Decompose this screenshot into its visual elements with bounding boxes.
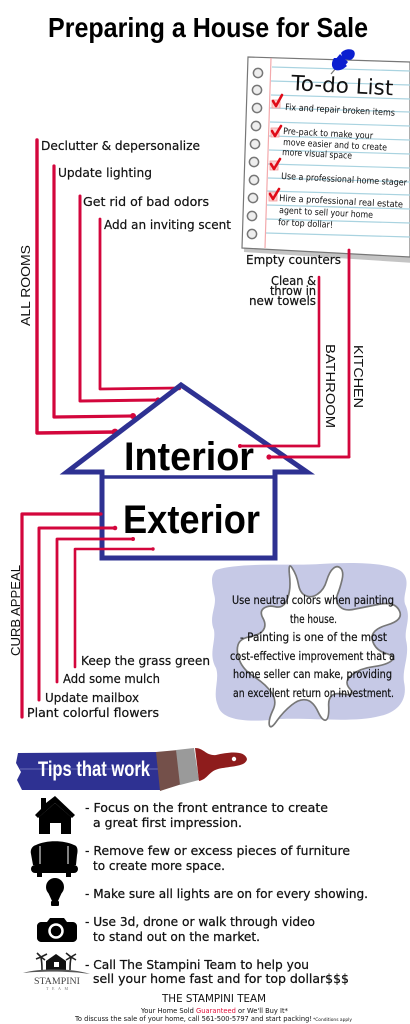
logo: Stampini Team xyxy=(23,953,90,991)
footer: THE STAMPINI TEAM xyxy=(161,993,266,1005)
tips text: - Remove few or excess pieces of furniture xyxy=(85,844,350,858)
exterior labels: Add some mulch xyxy=(63,672,160,686)
icon: sofa xyxy=(31,841,78,877)
check marks xyxy=(269,95,282,201)
heading: interior: Interior xyxy=(124,435,254,479)
tips text: - Make sure all lights are on for every showing. xyxy=(85,887,368,901)
tips text: to stand out on the market. xyxy=(93,930,260,944)
interior labels: throw in xyxy=(270,284,316,298)
interior labels: Update lighting xyxy=(58,166,152,180)
footer: Your Home Sold Guaranteed or We'll Buy It* xyxy=(140,1007,288,1015)
tips text xyxy=(85,801,368,986)
connectors redraw over house xyxy=(22,446,349,717)
heading: to-do list: To-do List xyxy=(290,71,394,100)
vertical labels: CURB APPEAL xyxy=(8,565,23,656)
tips text: a great first impression. xyxy=(93,816,242,830)
footer: To discuss the sale of your home, call 561-500-5797 and start packing! xyxy=(74,1015,312,1023)
vertical labels: KITCHEN xyxy=(351,345,366,408)
icon: house xyxy=(35,796,75,834)
logo: Stampini Team: TEAM xyxy=(46,986,68,991)
to-do items: move easier and to create xyxy=(283,138,388,153)
to-do items: more visual space xyxy=(282,148,353,162)
callout text: - Painting is one of the most xyxy=(240,630,387,644)
icon: push pin xyxy=(331,49,355,74)
interior labels: Clean & xyxy=(271,274,316,288)
interior labels: Declutter & depersonalize xyxy=(41,139,200,153)
icon: light bulb xyxy=(46,878,64,906)
house arrow xyxy=(67,385,307,558)
connectors: all rooms xyxy=(37,140,179,433)
exterior labels xyxy=(27,654,210,720)
tips text: - Call The Stampini Team to help you xyxy=(85,958,309,972)
callout text xyxy=(230,593,395,700)
brush handle xyxy=(195,748,247,781)
exterior labels: Keep the grass green xyxy=(81,654,210,668)
brush ferrule xyxy=(176,748,199,785)
interior labels: Empty counters xyxy=(246,253,341,267)
exterior labels: Update mailbox xyxy=(45,691,139,705)
banner text: Tips that work xyxy=(38,758,150,781)
logo: Stampini Team: STAMPINI xyxy=(34,976,80,986)
icon: camera xyxy=(37,918,77,942)
connectors: kitchen and bathroom xyxy=(240,250,349,457)
panel: to-do list note xyxy=(242,49,410,263)
title: Preparing a House for Sale xyxy=(48,12,368,43)
to-do items: Fix and repair broken items xyxy=(285,103,395,119)
to-do items xyxy=(278,103,407,231)
to-do items: agent to sell your home xyxy=(279,206,374,221)
brush bristle base xyxy=(156,750,182,791)
tips text: to create more space. xyxy=(93,859,225,873)
to-do items: for top dollar! xyxy=(278,218,333,231)
tips text: sell your home fast and for top dollar$$$ xyxy=(93,972,349,986)
vertical labels: ALL ROOMS xyxy=(18,245,33,326)
interior labels: Get rid of bad odors xyxy=(83,195,209,209)
interior labels: Add an inviting scent xyxy=(104,218,231,232)
tips text: - Use 3d, drone or walk through video xyxy=(85,915,315,929)
callout text: the house. xyxy=(290,612,337,626)
interior labels: new towels xyxy=(249,294,316,308)
to-do items: Pre-pack to make your xyxy=(283,127,374,142)
vertical labels: BATHROOM xyxy=(323,344,338,428)
exterior labels: Plant colorful flowers xyxy=(27,706,159,720)
panel: paint splash callout xyxy=(212,563,408,727)
footer: *Conditions apply xyxy=(313,1017,353,1022)
footer xyxy=(74,993,353,1023)
tips text: - Focus on the front entrance to create xyxy=(85,801,328,815)
vertical labels xyxy=(8,245,366,656)
banner: tips that work paintbrush xyxy=(16,748,247,791)
heading: exterior: Exterior xyxy=(123,498,260,542)
interior labels xyxy=(41,139,341,308)
connector dots xyxy=(98,386,272,551)
